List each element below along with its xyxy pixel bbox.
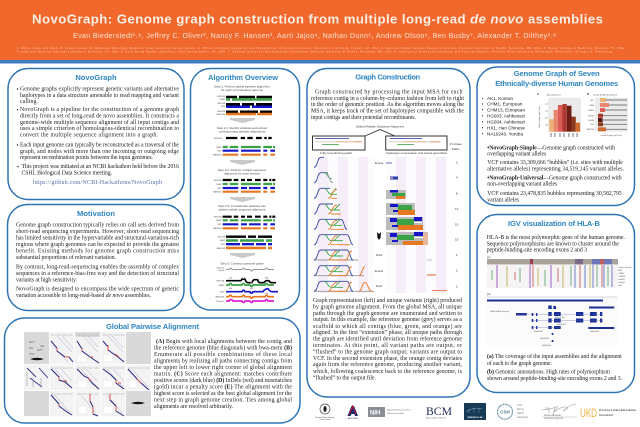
- unique path counts: 4: [456, 176, 458, 180]
- step 1: HX1: [221, 106, 226, 108]
- graph statistics: VCF contains 23,478,835 bubbles representing 30,582,795: [487, 191, 622, 197]
- genome list: HG004, Ashkenazi: [487, 119, 525, 124]
- step 1: GRCh38: [217, 103, 226, 105]
- bullet text: This project was initiated at an NCBI hackathon held before the 2016: [22, 163, 179, 170]
- bullet text: [17, 86, 179, 176]
- alignment description: the reference genome (blue diagonals) with bwa-mem (B): [154, 344, 292, 352]
- step 1: [214, 84, 272, 116]
- graph description: again from the reference genome, producing another variant,: [313, 361, 463, 368]
- chart: contig length distribution: NA19240: [586, 128, 594, 131]
- arrow: [230, 253, 255, 258]
- IGV figure b: HLA-B-001: [557, 323, 566, 326]
- bullet text: directly from a set of long-read de novo assemblies. It constructs a: [20, 112, 179, 120]
- logo: Memorial Sloan Kettering: Memorial Sloan Kettering: [316, 416, 335, 419]
- bullet text: graph, and nodes with more than one incoming or outgoing edge: [20, 149, 179, 155]
- IGV captions: (a) The coverage of the input assemblies and the alignment: [487, 353, 622, 360]
- genome list: HX1, Han Chinese: [487, 125, 525, 130]
- IGV figure a: HX1: [618, 285, 622, 287]
- haplotype blocks: [386, 176, 447, 290]
- graph description: [313, 297, 463, 382]
- step 2.3: CHM1: [219, 240, 226, 242]
- MSA boxes: # Unique: [450, 142, 462, 146]
- step 2.3: [213, 204, 275, 250]
- logo: NIH NHGRI: [368, 407, 411, 417]
- step 2.3: CHM1: [216, 220, 222, 222]
- alignment matrices figure: GCT: [29, 340, 35, 344]
- step 3: genome graph: [216, 262, 278, 303]
- unique path counts: [455, 160, 459, 288]
- logo: NIH NHGRI: Research Institute: [387, 412, 405, 415]
- step 3: genome graph: CHM1: [218, 285, 225, 287]
- bullet text: haplotypes in a data structure amenable to read mapping and variant: [20, 93, 179, 99]
- affiliations: [17, 47, 625, 54]
- logo: Cold Spring Harbor: Cold: [517, 404, 522, 407]
- step 3: genome graph: Step 3: Construct genome graph: [220, 262, 264, 266]
- step 2.3: NA19240: [213, 227, 222, 230]
- MSA boxes: [312, 124, 462, 155]
- logo: Cold Spring Harbor: Laboratory: [517, 416, 529, 419]
- IGV figure a: [487, 255, 632, 288]
- graph description: paths through the graph genome are enumerated and written to: [313, 311, 462, 317]
- alignment description: alignments are resolved arbitrarily.: [154, 404, 234, 410]
- graph statistics: VCF contains 33,309,666 "bubbles" (i.e. sites with multiple: [487, 159, 623, 166]
- motivation text: sequences in a reference-bias-free way and the detection of structural: [16, 270, 179, 277]
- graph description: VCF. In the second extension phase, the orange contig deviates: [313, 356, 463, 362]
- genome list: NA19240, Yoruba: [487, 131, 523, 136]
- MSA boxes: Fully recombining graph: [320, 151, 352, 155]
- genome list: HG003, Ashkenazi: [487, 113, 525, 118]
- step 1: for each non-reference genome: [221, 88, 263, 92]
- motivation text: variants at high sensitivity.: [16, 277, 78, 283]
- intro text: reference contig in a column-by-column fashion from left to right: [311, 95, 464, 102]
- bullet text: CSHL Biological Data Science meeting.: [22, 170, 113, 176]
- chart: contig length distribution: B: [587, 93, 589, 96]
- step 2.1: corresponding pairwise alignments: [219, 130, 266, 134]
- logo: Cold Spring Harbor: CSH: [500, 409, 511, 414]
- logo: Memorial Sloan Kettering: [316, 404, 335, 421]
- IGV figure a: CHM1: [618, 273, 624, 275]
- IGV figure b: HLA-B-004: [542, 344, 551, 347]
- graph statistics: non-overlapping variant alleles: [487, 182, 558, 188]
- genome list: CHM1, European: [487, 102, 523, 107]
- step 2.2: NA19240: [213, 190, 222, 194]
- unique path counts: 15: [455, 238, 459, 242]
- heading: NovoGraph: NovoGraph: [75, 73, 117, 82]
- bullet text: represent recombination points between the input genomes.: [20, 155, 154, 161]
- affiliations: 5. Lawrence Berkeley National Laboratory, Berkeley, CA, USA, 6. Cold Spring Harbor Laboratory, Cold Spring Harbor, NY, USA, 7. National Center for Biotechnology Information, National Institutes of Health, Bethesda, MD, USA, 8. Institute of Medical Microbiology and Hospital Hygiene, Heinrich Heine University Düsseldorf, Düsseldorf, Germany 9. Presenting: [17, 51, 613, 54]
- alignment description: matrix. (C) Score each alignment: matches contribute: [154, 370, 292, 378]
- chart: contig length distribution: [586, 93, 628, 137]
- step 3: genome graph: HX1: [220, 292, 225, 294]
- IGV intro: peptide-binding-site encoding exons 2 and 3: [487, 248, 587, 254]
- step 2.1: CHM1: [216, 147, 222, 149]
- heading: Graph Construction: Graph Construction: [355, 73, 421, 82]
- chart: contig length distribution: CHM1: [589, 105, 594, 107]
- bullet text: genome-wide multiple sequence alignment of all input contigs and: [20, 119, 179, 126]
- step 1: NA19240: [217, 113, 226, 116]
- step 2.1: HX1: [218, 150, 222, 152]
- step 1: GRCh38: [217, 96, 226, 98]
- panel: Global Pairwise Alignment: [4, 318, 300, 423]
- unique path counts: 12: [455, 207, 459, 211]
- logo: Cold Spring Harbor: Spring: [517, 408, 524, 411]
- chart: contig length distribution: AK1: [591, 99, 594, 102]
- graph description: scaffold to which all contigs (blue, green, and orange) are: [313, 323, 462, 330]
- panel: NovoGraph: [8, 68, 184, 200]
- IGV captions: (b) Genomic annotations. High rates of polymorphism: [487, 368, 610, 376]
- step 3: genome graph: NA19240: [216, 296, 225, 298]
- motivation text: [16, 222, 180, 299]
- heading: Genome Graph: Ethnically-diverse Human Genomes: [495, 79, 618, 88]
- motivation text: By contrast, long-read-sequencing enables the assembly of complex: [16, 264, 179, 271]
- step 2.3: HX1: [221, 244, 226, 246]
- chart: assembly size: Assembly size: [547, 94, 562, 96]
- IGV figure a: Graph Genome: [618, 266, 632, 269]
- heading: Global Pairwise Alignment: Global Pairwise Alignment: [106, 322, 199, 331]
- logo: UKD: UKD: [580, 406, 597, 420]
- alignment matrices figure: TTC: [29, 352, 34, 356]
- graph statistics: [487, 145, 625, 204]
- chart: assembly size: [537, 93, 581, 137]
- logo: Heinrich Heine University: HEINRICH HEINE: [544, 415, 562, 417]
- arrow: [230, 118, 255, 123]
- logo: Heinrich Heine University: UNIVERSITÄT DÜSSELDORF: [544, 417, 563, 420]
- motivation text: variation accessible to long-read-based de novo assemblies.: [16, 293, 152, 299]
- heading: Genome Graph: Genome Graph of Seven: [514, 69, 600, 78]
- heading: IGV: IGV visualization of HLA-B: [508, 219, 601, 228]
- unique path counts: 1: [456, 253, 458, 257]
- logo: Baylor College of Medicine: Baylor College of Medicine: [426, 416, 446, 420]
- logo: NIH NHGRI: National Human Genome: [387, 408, 411, 412]
- bullet text: calling.: [20, 99, 39, 105]
- graph statistics: •NovoGraph-Universal—Genome graph constructed with: [487, 176, 622, 182]
- motivation text: regions where graph genomes can be expected to provide the greatest: [16, 242, 179, 248]
- arrow: [230, 160, 255, 165]
- step 2.1: GRCh38: [214, 138, 222, 140]
- genome list: CHM13, European: [487, 107, 525, 112]
- IGV captions: [487, 353, 623, 382]
- alignment description: alignments by realizing all paths connecting contigs from: [154, 358, 292, 365]
- graph description: the graph are identified until deviation from reference genome: [313, 336, 462, 342]
- step 1: Step 1: Perform global pairwise alignment: [214, 84, 270, 88]
- alignment description: the upper left to lower right corner of global alignment: [154, 364, 292, 371]
- IGV figure b: NM_005514: [555, 317, 565, 319]
- graph description: output. In this example, the reference genome (grey) serves as a: [313, 316, 462, 323]
- step 1: CHM1: [219, 99, 226, 101]
- IGV figure a: CHM13: [618, 276, 625, 278]
- step 3: genome graph: Graph: [218, 270, 224, 272]
- IGV figure b: HLA-B-005: [590, 330, 599, 333]
- unique path counts: 2: [456, 284, 458, 288]
- graph statistics: overlapping variant alleles: [487, 152, 547, 158]
- row labels: [375, 161, 384, 288]
- graph description: “flushed” to the output file.: [313, 374, 377, 382]
- step 2.2: HX1: [218, 188, 222, 190]
- logo: Baylor College of Medicine: BCM: [426, 406, 452, 418]
- logo: Berkeley Lab: BERKELEY LAB: [468, 416, 483, 419]
- step 1: GRCh38: [217, 111, 226, 113]
- panel: Genome Graph of Seven Ethnically-diverse Human Genomes: [477, 67, 634, 206]
- alignment matrices figure: [24, 332, 151, 416]
- panel: Motivation: [8, 204, 184, 310]
- MSA boxes: Haplotype enumeration and output generation: [386, 151, 448, 155]
- chart: contig length distribution: HX1: [590, 124, 594, 126]
- logo: Cold Spring Harbor: Harbor: [517, 412, 524, 415]
- intro text: Graph constructed by processing the input MSA for each: [315, 88, 463, 96]
- alignment description: (gold) incur a penalty score (E) The alignment with the: [154, 384, 292, 390]
- motivation text: short-read sequencing experiments. However, short-read sequencing: [16, 229, 179, 235]
- step 2.3: GRCh38: [217, 236, 226, 238]
- IGV figure b: HLA-B-003: [540, 337, 549, 340]
- logo: UKD: [580, 406, 636, 420]
- chart: contig length distribution: CHM13: [588, 110, 594, 112]
- row labels: Flush: [376, 253, 383, 257]
- alignment matrices figure: GTT: [37, 348, 43, 352]
- panel: Graph Construction: [307, 68, 470, 397]
- link: https://github.com/NCBI-Hackathons/NovoGraph: [33, 180, 162, 186]
- alignment matrices figure: CG: [40, 344, 44, 348]
- MSA boxes: Global Multiple Sequence Alignment: [356, 124, 404, 128]
- heading: Genome Graph: [495, 69, 618, 88]
- IGV intro: Sequence polymorphisms are known to cluster around the: [487, 241, 619, 247]
- heading: Motivation: Motivation: [77, 209, 115, 218]
- IGV captions: shown around peptide-binding-site encoding exons 2 and 3.: [487, 376, 623, 382]
- IGV figure a: AK1: [618, 269, 622, 272]
- bullet text: convert the multiple sequence alignment into a graph.: [20, 132, 159, 138]
- logo: Heinrich Heine University: [542, 404, 577, 420]
- IGV figure b: HLA-B-002: [534, 330, 543, 333]
- graph statistics: alternative alleles) representing 34,519,145 variant alleles.: [487, 166, 625, 172]
- motivation text: has limited sensitivity in the hypervariable and structural-variation-rich: [16, 236, 179, 242]
- logo: Memorial Sloan Kettering: Cancer Center: [320, 418, 331, 421]
- graph description: Graph representation (left) and unique variants (right) produced: [313, 297, 462, 304]
- panel: Algorithm Overview: [190, 68, 300, 310]
- bullet text: Each input genome can typically be reconstructed as a traversal of the: [20, 142, 179, 148]
- logo: NIH NHGRI: NIH: [370, 410, 380, 416]
- logo: Cold Spring Harbor: [498, 404, 529, 419]
- step 2.1: Step 2.1: Identify windows and extract: [217, 126, 267, 130]
- motivation text: NovoGraph is designed to encompass the wide spectrum of genetic: [16, 286, 179, 293]
- heading: Algorithm Overview: Algorithm Overview: [208, 73, 278, 82]
- graph description: by graph genome alignment. From the global MSA, all unique: [313, 304, 462, 310]
- MSA boxes: Paths: [452, 147, 460, 151]
- chart: contig length distribution: Contig length distribution: [593, 94, 618, 96]
- IGV captions: of each to the graph genome.: [487, 360, 553, 367]
- alignment description: Enumerate all possible combinations of these local: [154, 351, 292, 358]
- step 2.2: GRCh38: [214, 180, 222, 182]
- motivation text: substantial proportions of relevant variation.: [16, 254, 117, 261]
- panel: IGV visualization of HLA-B: [477, 214, 634, 392]
- step 2.2: Step 2.2: Perform multiple sequence: [218, 168, 267, 172]
- step 2.3: global multiple sequence alignment: [219, 208, 266, 212]
- step 2.2: [213, 168, 275, 194]
- logo: University of Arizona: [348, 406, 358, 420]
- graph description: terminates. At this point, all variant paths are output, or: [313, 343, 462, 349]
- genome list: [482, 96, 525, 136]
- header banner: [0, 0, 640, 64]
- step 2.3: Step 2.3: Concatenate windows into: [218, 204, 266, 208]
- alignment description: (A) Begin with local alignments between the contig and: [156, 338, 292, 345]
- alignment description: next step in graph genome creation. Ties among global: [154, 397, 292, 403]
- IGV figure b: [487, 292, 618, 347]
- alignment description: highest score is selected as the best global alignment for the: [154, 390, 292, 397]
- chart: contig length distribution: HG004: [588, 120, 594, 122]
- graph description: aligned. In the first “extension” phase, all unique paths through: [313, 329, 462, 336]
- step 2.3: NA19240: [217, 247, 226, 250]
- IGV figure b: (b): [487, 292, 490, 296]
- alignment description: positive scores (dark blue) (D) InDels (red) and mismatches: [154, 377, 293, 384]
- logo: UKD: Düsseldorf: [599, 413, 614, 417]
- unique path counts: 2: [456, 269, 458, 273]
- chart: assembly size: A: [537, 93, 539, 96]
- step 2.2: alignment for each window: [224, 172, 261, 176]
- IGV intro: HLA-B is the most polymorphic gene of the human genome.: [487, 234, 626, 241]
- logo: Berkeley Lab: [464, 403, 486, 420]
- IGV figure a: HG003: [618, 279, 624, 281]
- bullet text: uses a simple criterion of homologous-identical recombination to: [20, 125, 179, 132]
- alignment matrices figure: GA: [29, 346, 33, 350]
- unique path counts: 8: [456, 191, 458, 195]
- unique path counts: 2: [456, 160, 458, 164]
- step 2.2: CHM1: [216, 184, 222, 186]
- graph statistics: variant alleles: [487, 198, 520, 204]
- intro text: [311, 88, 464, 121]
- IGV figure a: (a): [487, 255, 490, 259]
- step 2.1: NA19240: [213, 154, 222, 156]
- logos row: [316, 403, 636, 421]
- chart: assembly size: Total contig length (Gbp): [538, 106, 541, 128]
- genome list: AK1, Korean: [487, 96, 513, 101]
- row labels: Flush: [376, 284, 383, 288]
- intro text: in the order of genomic position. As the algorithm moves along the: [311, 101, 464, 108]
- step 3: genome graph: Genome: [216, 268, 225, 270]
- chart: contig length distribution: HG003: [588, 116, 594, 118]
- row labels: Extend: [375, 161, 384, 165]
- step 2.3: GRCh38: [214, 216, 222, 218]
- arrow: [230, 197, 255, 202]
- authors: Evan Biederstedt¹˒⁹, Jeffrey C. Oliver², Nancy F. Hansen³, Aarti Jajoo⁴, Nathan Dunn⁵, Andrew Olson⁶, Ben Busby⁷, Alexander T. Dilthey³˒⁸: [73, 33, 556, 40]
- row labels: Extend: [375, 269, 384, 273]
- step 3: genome graph: "Phased": [216, 301, 224, 303]
- bullet text: NovoGraph is a pipeline for the construction of a genome graph: [20, 106, 179, 113]
- title: NovoGraph: Genome graph construction from multiple long-read de novo assemblies: [32, 12, 603, 26]
- graph description: which, following coalescence back to the reference genome, is: [313, 368, 463, 375]
- chart: contig length distribution: Contig length (log10 bp): [600, 134, 622, 137]
- graph statistics: •NovoGraph-Simple—Genome graph constructed with: [487, 145, 615, 151]
- step 3: genome graph: GRCh38: [216, 280, 225, 282]
- step 2.3: HX1: [218, 224, 222, 226]
- motivation text: Genome graph construction typically relies on call sets derived from: [16, 222, 179, 229]
- unique path counts: 15: [455, 222, 459, 226]
- intro text: input contigs and their potential recombinants.: [311, 115, 417, 121]
- motivation text: benefit. Existing methods for genome graph construction miss: [16, 248, 180, 255]
- graph description: “flushed” to the genome graph output; variants are output to: [313, 348, 462, 356]
- alignment description: [154, 338, 293, 410]
- logo: UKD: Universitätsklinikum: [599, 408, 636, 412]
- step 2.1: [213, 126, 275, 156]
- IGV intro: [487, 234, 626, 254]
- intro text: MSA, it keeps track of the set of haplotypes compatible with the: [311, 107, 464, 114]
- logo: University of Arizona: ARIZONA: [348, 417, 358, 420]
- graph traversal plots: [312, 157, 459, 293]
- bullet text: Genome graphs explicitly represent genetic variants and alternative: [20, 86, 179, 92]
- IGV figure b: GENE-HLA-B transcript: [490, 310, 509, 313]
- affiliations: 1. Marie-Josée and Henry R. Kravis Center for Molecular Oncology, Memorial Sloan Kettering Cancer Center, 2. Office of Digital Innovation and Stewardship, University Libraries, University of Arizona, Tucson, AZ, USA, 3. National Human Genome Research Institute, National Institutes of Health, Bethesda, MD, USA, 4. Baylor College of Medicine, Houston, TX, USA,: [17, 47, 625, 50]
- IGV figure a: HG004: [618, 282, 624, 284]
